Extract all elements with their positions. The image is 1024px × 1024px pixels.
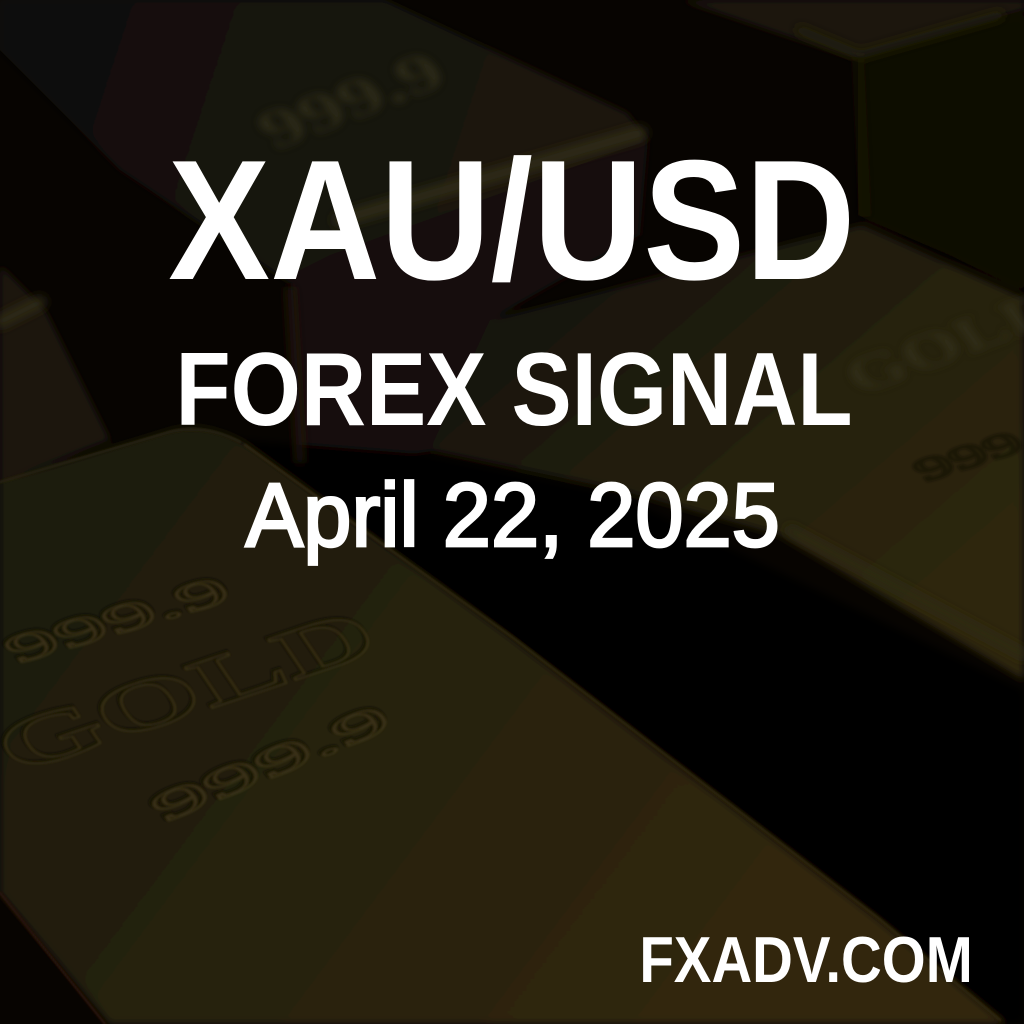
- top back bar face: [0, 0, 648, 283]
- thin rims of the main bar: [0, 430, 1000, 1024]
- embossed stamps: blurred background bars: [243, 40, 1024, 405]
- date: April 22, 2025: [245, 466, 780, 566]
- right bar: [430, 225, 1024, 680]
- embossed stamp: main bar: 999.9: [0, 569, 241, 672]
- dark gap: [240, 440, 1024, 1024]
- website label: FXADV.COM: [639, 923, 973, 996]
- main bar: [0, 427, 1005, 1024]
- embossed stamp: main bar: 999.9: [0, 567, 240, 670]
- top right block: [680, 0, 1024, 58]
- left small bar: [0, 265, 110, 482]
- title: XAU/USD: [168, 125, 855, 316]
- embossed stamp: main bar: 999.9: [141, 697, 401, 831]
- top back bar front side: [290, 140, 648, 470]
- embossed stamp: main bar: 999.9: [139, 695, 399, 829]
- embossed stamps: blurred background bars: 999.9: [243, 40, 458, 161]
- lit edges of the bars: [0, 15, 1024, 655]
- subtitle: FOREX SIGNAL: [175, 332, 853, 448]
